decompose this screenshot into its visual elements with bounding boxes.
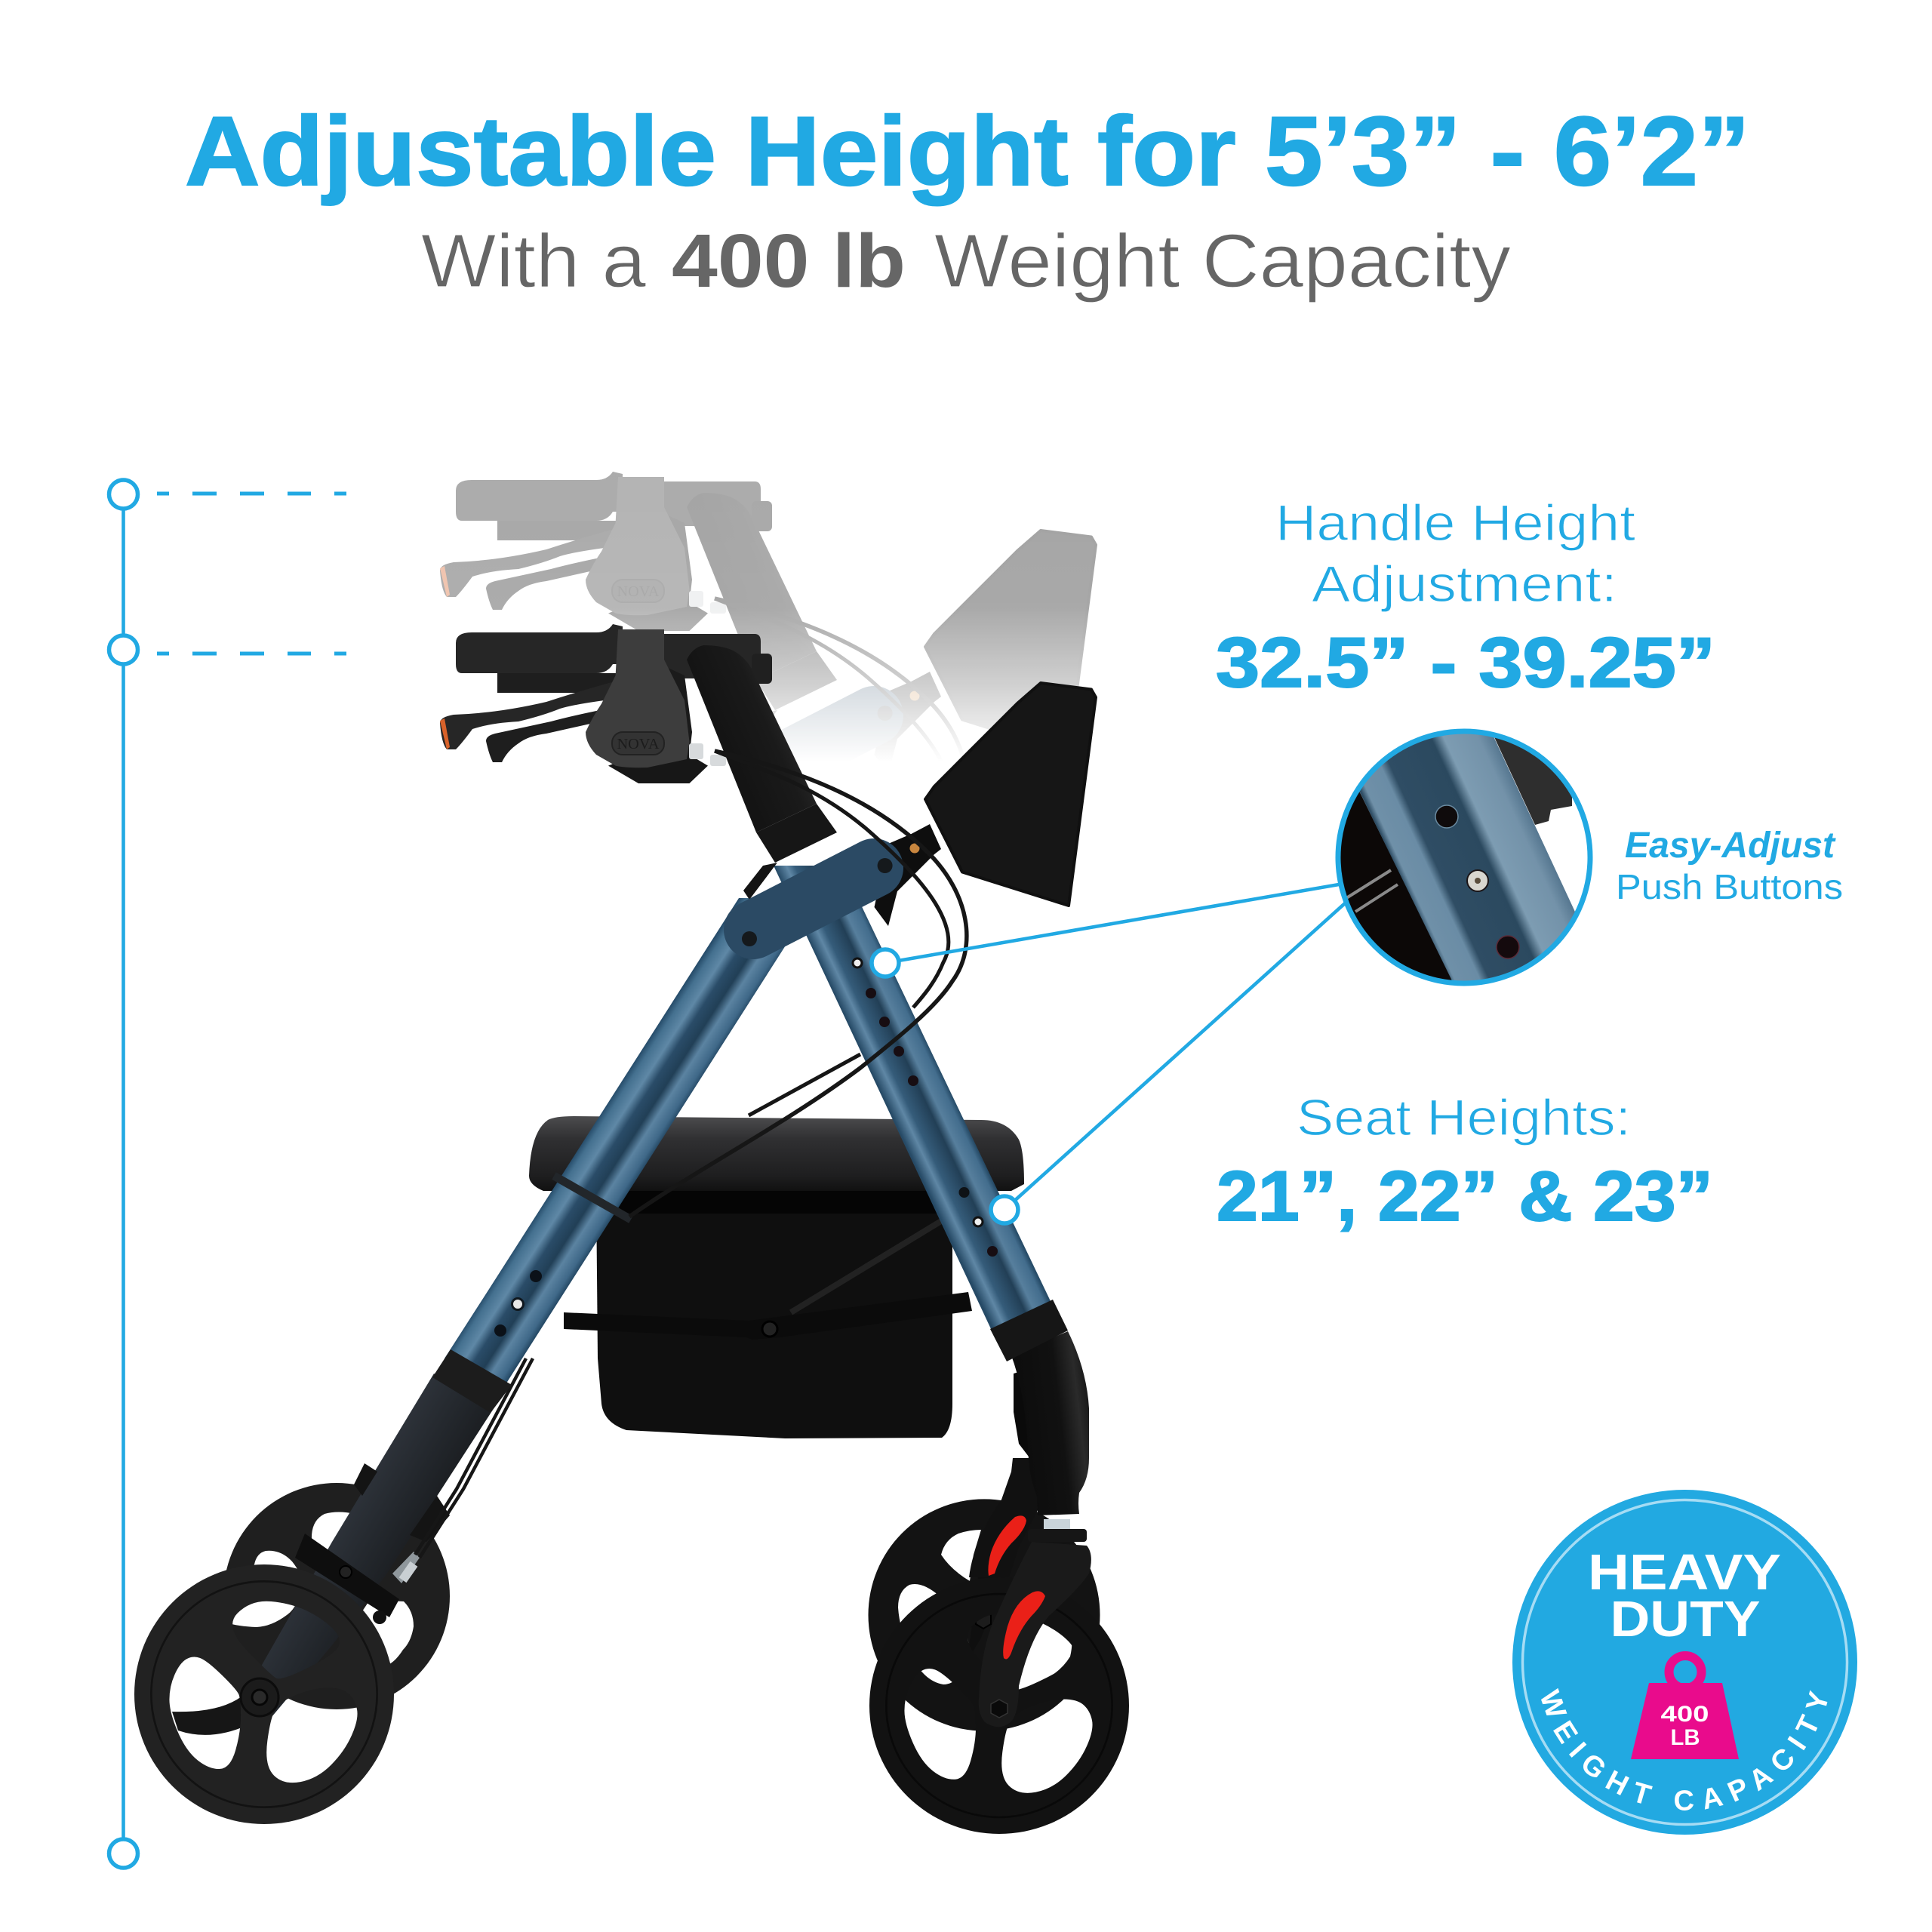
front blue tube [774, 866, 1058, 1343]
back-left wheel [223, 1483, 450, 1709]
push buttons label [1616, 826, 1843, 906]
subtitle [421, 219, 1511, 303]
rear end knob [752, 654, 772, 684]
backrest bracket [874, 824, 941, 926]
seat heights label: Seat Heights: [1297, 1089, 1631, 1146]
weight icon: LB [1671, 1725, 1700, 1750]
subtitle: With a [421, 219, 646, 303]
seat heights label: 21”, 22” & 23” [1217, 1156, 1713, 1235]
brake cables [715, 751, 949, 1008]
seat heights label [1217, 1089, 1713, 1235]
orange lever tip [440, 718, 450, 749]
rear blue tube [445, 898, 816, 1396]
cable adjusters [689, 743, 726, 766]
front-right wheel [869, 1577, 1129, 1834]
brake lever one [440, 679, 623, 749]
cable behind front leg [749, 1054, 860, 1115]
upper assembly: handle, backrest, hinge, cables [440, 624, 1096, 1217]
hinge wedge [743, 863, 777, 900]
subtitle: 400 lb [672, 219, 906, 303]
handle height label: 32.5” - 39.25” [1216, 623, 1715, 702]
seat pad [529, 1116, 1024, 1214]
back-right wheel [868, 1499, 1100, 1731]
heavy duty badge [1512, 1490, 1857, 1835]
bottom clamp piece [608, 755, 708, 783]
back fork with reflector [968, 1458, 1039, 1660]
weight icon [1631, 1656, 1739, 1759]
NOVA logo [612, 732, 664, 755]
side mount [657, 663, 692, 759]
cross bar and strut [564, 1221, 972, 1340]
front boot and collar [990, 1300, 1089, 1529]
height scale line with markers [109, 480, 346, 1868]
badge heading [1588, 1544, 1781, 1647]
badge heading: HEAVY [1588, 1544, 1781, 1601]
backrest pad [925, 683, 1096, 906]
handle height label: Adjustment: [1312, 555, 1617, 613]
badge heading: DUTY [1611, 1591, 1760, 1647]
ghost: raised handle position [440, 472, 1097, 749]
hinge plate [742, 844, 919, 946]
grip [456, 624, 623, 673]
handle tube [687, 645, 817, 832]
push buttons label: Easy-Adjust [1625, 826, 1836, 866]
subtitle: Weight Capacity [934, 219, 1511, 303]
handle height label: Handle Height [1275, 494, 1635, 552]
cap tube [657, 634, 761, 678]
push buttons label: Push Buttons [1616, 867, 1843, 906]
lower grip bar [497, 673, 618, 693]
handle sleeve [756, 804, 837, 863]
brake lever two [486, 709, 604, 762]
storage basket [596, 1191, 952, 1438]
NOVA logo: NOVA [617, 736, 660, 752]
weight icon: 400 [1660, 1702, 1709, 1727]
clamp body [586, 629, 690, 768]
far spoke visible through front-left wheel [172, 1697, 249, 1735]
rear leg collar [432, 1349, 512, 1413]
rear lower leg and wheel clamp [243, 1358, 533, 1717]
front-left wheel [134, 1564, 394, 1824]
curved badge caption: WEIGHT CAPACITY [1541, 1687, 1828, 1810]
title: Adjustable Height for 5’3” - 6’2” [185, 96, 1750, 206]
handle height label [1216, 494, 1715, 702]
callout lines and anchor dots [872, 884, 1345, 1223]
front fork with reflector [979, 1529, 1091, 1727]
cable tie [554, 1176, 631, 1220]
magnified push button inset [1336, 729, 1592, 986]
